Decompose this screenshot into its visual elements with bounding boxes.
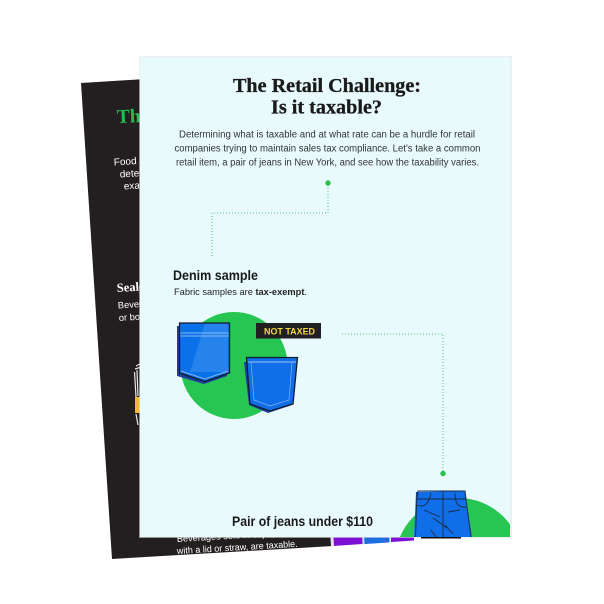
back page title: The Food Challenge — [116, 101, 285, 128]
jeans bottom hem strip — [421, 537, 461, 538]
icon: jeans — [414, 491, 472, 537]
intro text — [174, 130, 480, 168]
arrow: dotted connector to denim sample — [212, 180, 331, 256]
intro text: Determining what is taxable and at what rate can be a hurdle for retail — [179, 130, 475, 140]
back page intro text: Food and beverages — [113, 152, 206, 168]
panel: back page — [81, 79, 414, 559]
label: not taxed: NOT TAXED — [264, 326, 315, 338]
heading: denim sample: Denim sample — [173, 267, 258, 283]
back page intro text — [113, 152, 206, 192]
icon: left pocket — [177, 323, 230, 384]
icon: right pocket — [244, 358, 298, 413]
illustration: jeans on green circle — [400, 490, 510, 537]
back page bottom text — [176, 528, 298, 556]
back page section text: Beverages sold — [117, 296, 182, 310]
back page section heading: Sealed beverage — [116, 276, 203, 295]
back page intro text: determine — [119, 167, 165, 180]
icon: beverage cup — [134, 364, 141, 425]
back page section text: or bottles — [118, 311, 158, 323]
title — [233, 75, 421, 118]
panel: front page — [139, 56, 512, 538]
intro text: retail item, a pair of jeans in New York, and see how the taxability varies. — [176, 158, 479, 168]
back page bottom colour strip — [330, 530, 414, 546]
label: not taxed — [256, 323, 321, 338]
back page section text — [117, 296, 182, 323]
back page bottom text: Beverages sold in cups, — [177, 528, 274, 544]
back page bottom text: with a lid or straw, are taxable. — [176, 539, 298, 556]
title: The Retail Challenge: — [233, 75, 421, 97]
text: fabric samples: Fabric samples are tax-exempt. — [174, 287, 307, 298]
title: Is it taxable? — [271, 96, 382, 118]
intro text: companies trying to maintain sales tax compliance. Let's take a common — [174, 144, 480, 154]
back page intro text: example — [123, 179, 162, 192]
arrow: dotted connector to jeans — [342, 334, 446, 476]
illustration: denim pockets on green circle — [177, 312, 298, 419]
heading: pair of jeans: Pair of jeans under $110 — [232, 513, 373, 529]
